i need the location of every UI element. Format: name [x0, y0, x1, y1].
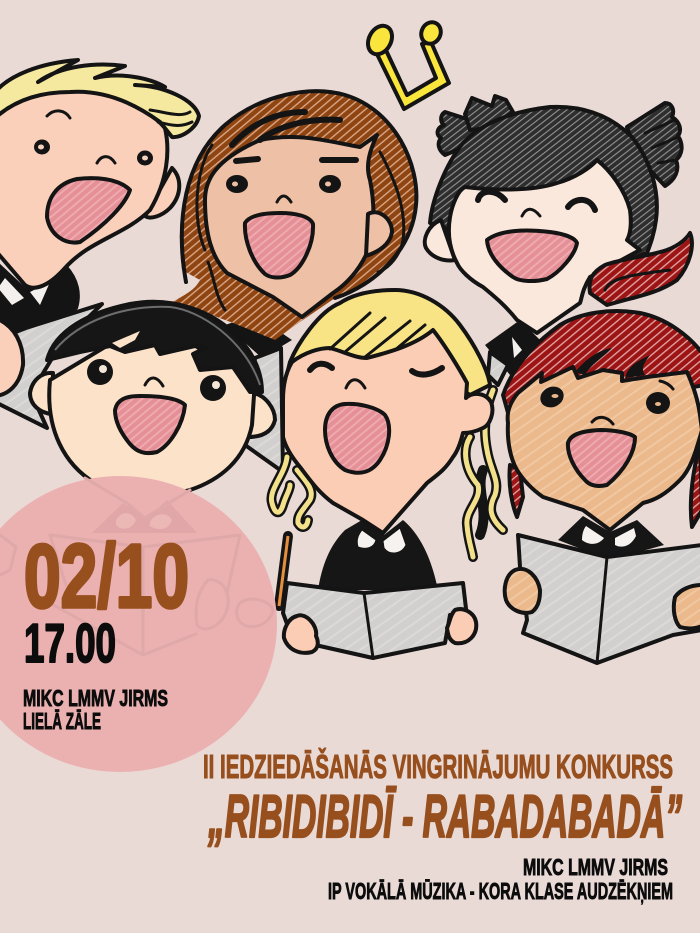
singer: boy with black hair: [30, 302, 283, 496]
icon: yellow music note: [363, 19, 449, 109]
singer: red-haired girl: [503, 311, 700, 663]
body: [318, 520, 438, 590]
hands: [505, 569, 700, 628]
ear: [425, 220, 455, 260]
baton: [279, 536, 288, 606]
hair: [0, 60, 199, 137]
face: [283, 330, 492, 533]
singer: blonde girl with curls: [271, 290, 503, 658]
mouth: [487, 231, 577, 281]
mouth: [568, 430, 635, 486]
eyes and nose: [537, 381, 673, 424]
hair: [430, 107, 657, 270]
face: [449, 160, 640, 333]
ghost illustration inside circle: [0, 478, 273, 655]
mouth: [245, 213, 313, 278]
closed eyes and nose: [310, 364, 442, 388]
hands: [284, 609, 476, 653]
left pigtail: [438, 112, 480, 155]
singer: blond boy: [0, 60, 199, 288]
venue: [23, 685, 168, 734]
venue: MIKC LMMV JIRMS: [23, 685, 168, 711]
eyes and nose: [34, 111, 153, 166]
hair: [503, 311, 700, 420]
collar: [582, 526, 636, 547]
date: 02/10: [24, 527, 189, 627]
hair: [170, 91, 416, 340]
eyes and nose: [87, 359, 226, 401]
red hair ribbon: [590, 233, 692, 305]
time: 17.00: [24, 612, 116, 674]
singer: brown-haired girl: [170, 91, 416, 358]
mouth: [115, 396, 185, 453]
ear: [366, 212, 392, 256]
fringe: [575, 348, 650, 378]
open book: [518, 535, 700, 663]
eyes, brows and nose: [226, 159, 356, 202]
mouth: [325, 404, 389, 473]
hair: [47, 302, 262, 392]
bangs: [330, 313, 425, 357]
curls: [271, 390, 503, 557]
right pigtail: [627, 103, 682, 186]
venue: LIELĀ ZĀLE: [23, 708, 101, 734]
illustration: singing choir: [0, 19, 700, 663]
closed eyes and nose: [478, 192, 595, 216]
text block: audience: [328, 854, 673, 904]
face: [49, 320, 255, 496]
open book: [283, 583, 467, 658]
mouth: [47, 178, 130, 243]
face: [508, 367, 700, 530]
singer: dark-haired girl: [425, 96, 692, 385]
panel: pink date circle: [0, 476, 277, 772]
singer: far-left body and book: [0, 262, 102, 428]
collar: [357, 528, 406, 553]
hair: [284, 290, 490, 400]
body: [558, 516, 664, 560]
